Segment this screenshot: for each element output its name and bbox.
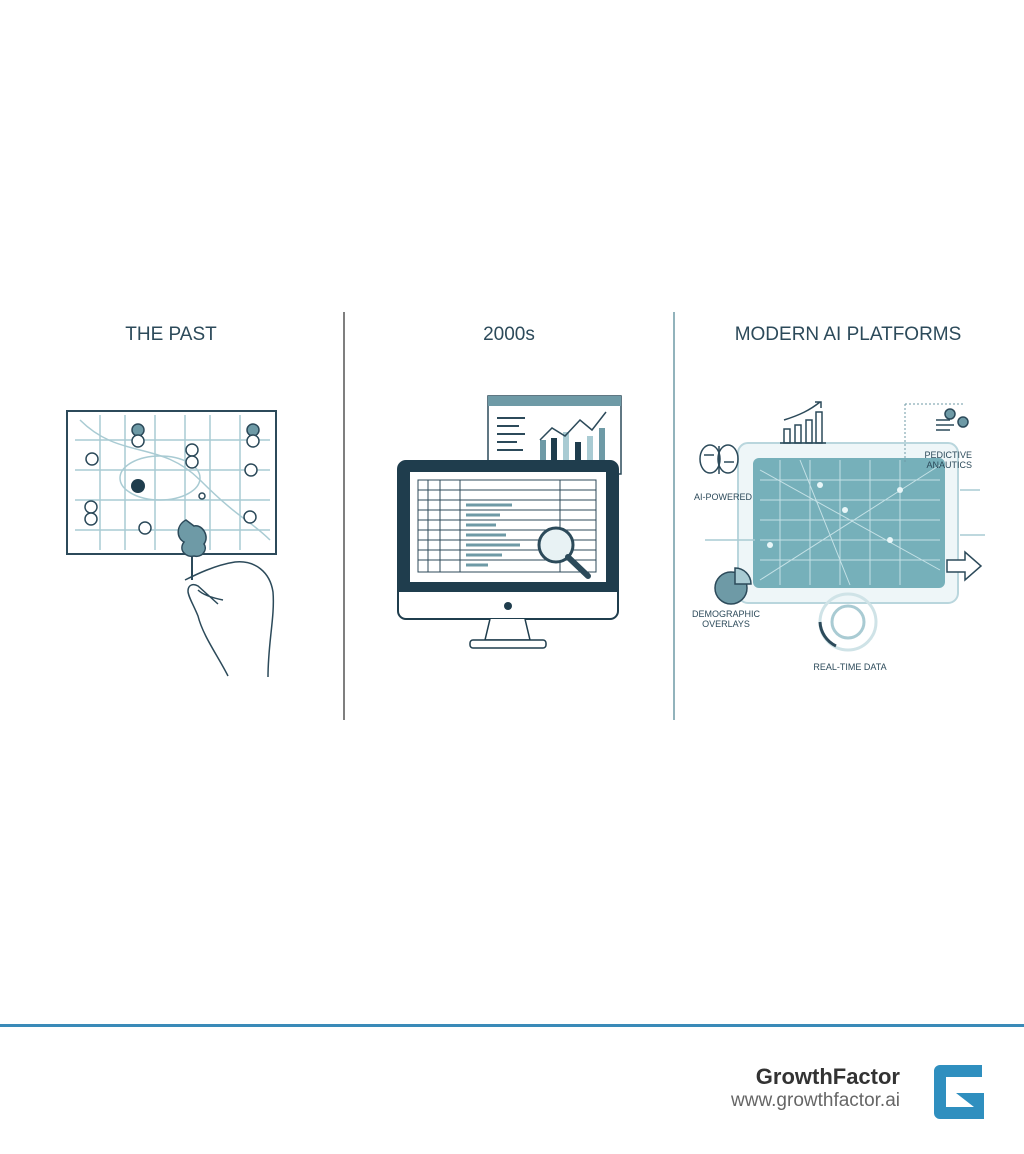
footer brand text [731,1064,900,1111]
label: predictive analytics: PEDICTIVE [924,450,972,460]
divider [343,312,345,720]
icon: predictive analytics [936,409,968,430]
icon: arrow [947,552,981,580]
label: real-time data: REAL-TIME DATA [813,662,887,672]
heading: modern ai platforms: MODERN AI PLATFORMS [735,324,961,345]
label: demographic overlays: DEMOGRAPHIC [692,609,760,619]
panel: 2000s [398,324,621,648]
icon: tablet with city map [705,443,985,603]
footer brand text: GrowthFactor [756,1064,900,1089]
icon: real-time ring [820,594,876,650]
logo: growthfactor G [934,1065,984,1119]
icon: paper map with pins [67,411,276,554]
label: predictive analytics: ANAUTICS [926,460,972,470]
icon: bar chart growth [780,402,826,443]
label: ai-powered: AI-POWERED [694,492,753,502]
heading: 2000s: 2000s [483,324,535,345]
heading: the past: THE PAST [125,324,217,345]
icon: pie chart [715,568,751,604]
icon: chart window [488,396,621,474]
icon: desktop monitor with spreadsheet [398,461,618,648]
footer brand text: www.growthfactor.ai [731,1090,900,1111]
label: demographic overlays: OVERLAYS [702,619,750,629]
footer line [0,1024,1024,1027]
icon: brain [700,445,738,474]
panel: the past [67,324,276,677]
icon: hand placing pin [178,520,273,677]
panel: modern ai platforms [692,324,985,672]
